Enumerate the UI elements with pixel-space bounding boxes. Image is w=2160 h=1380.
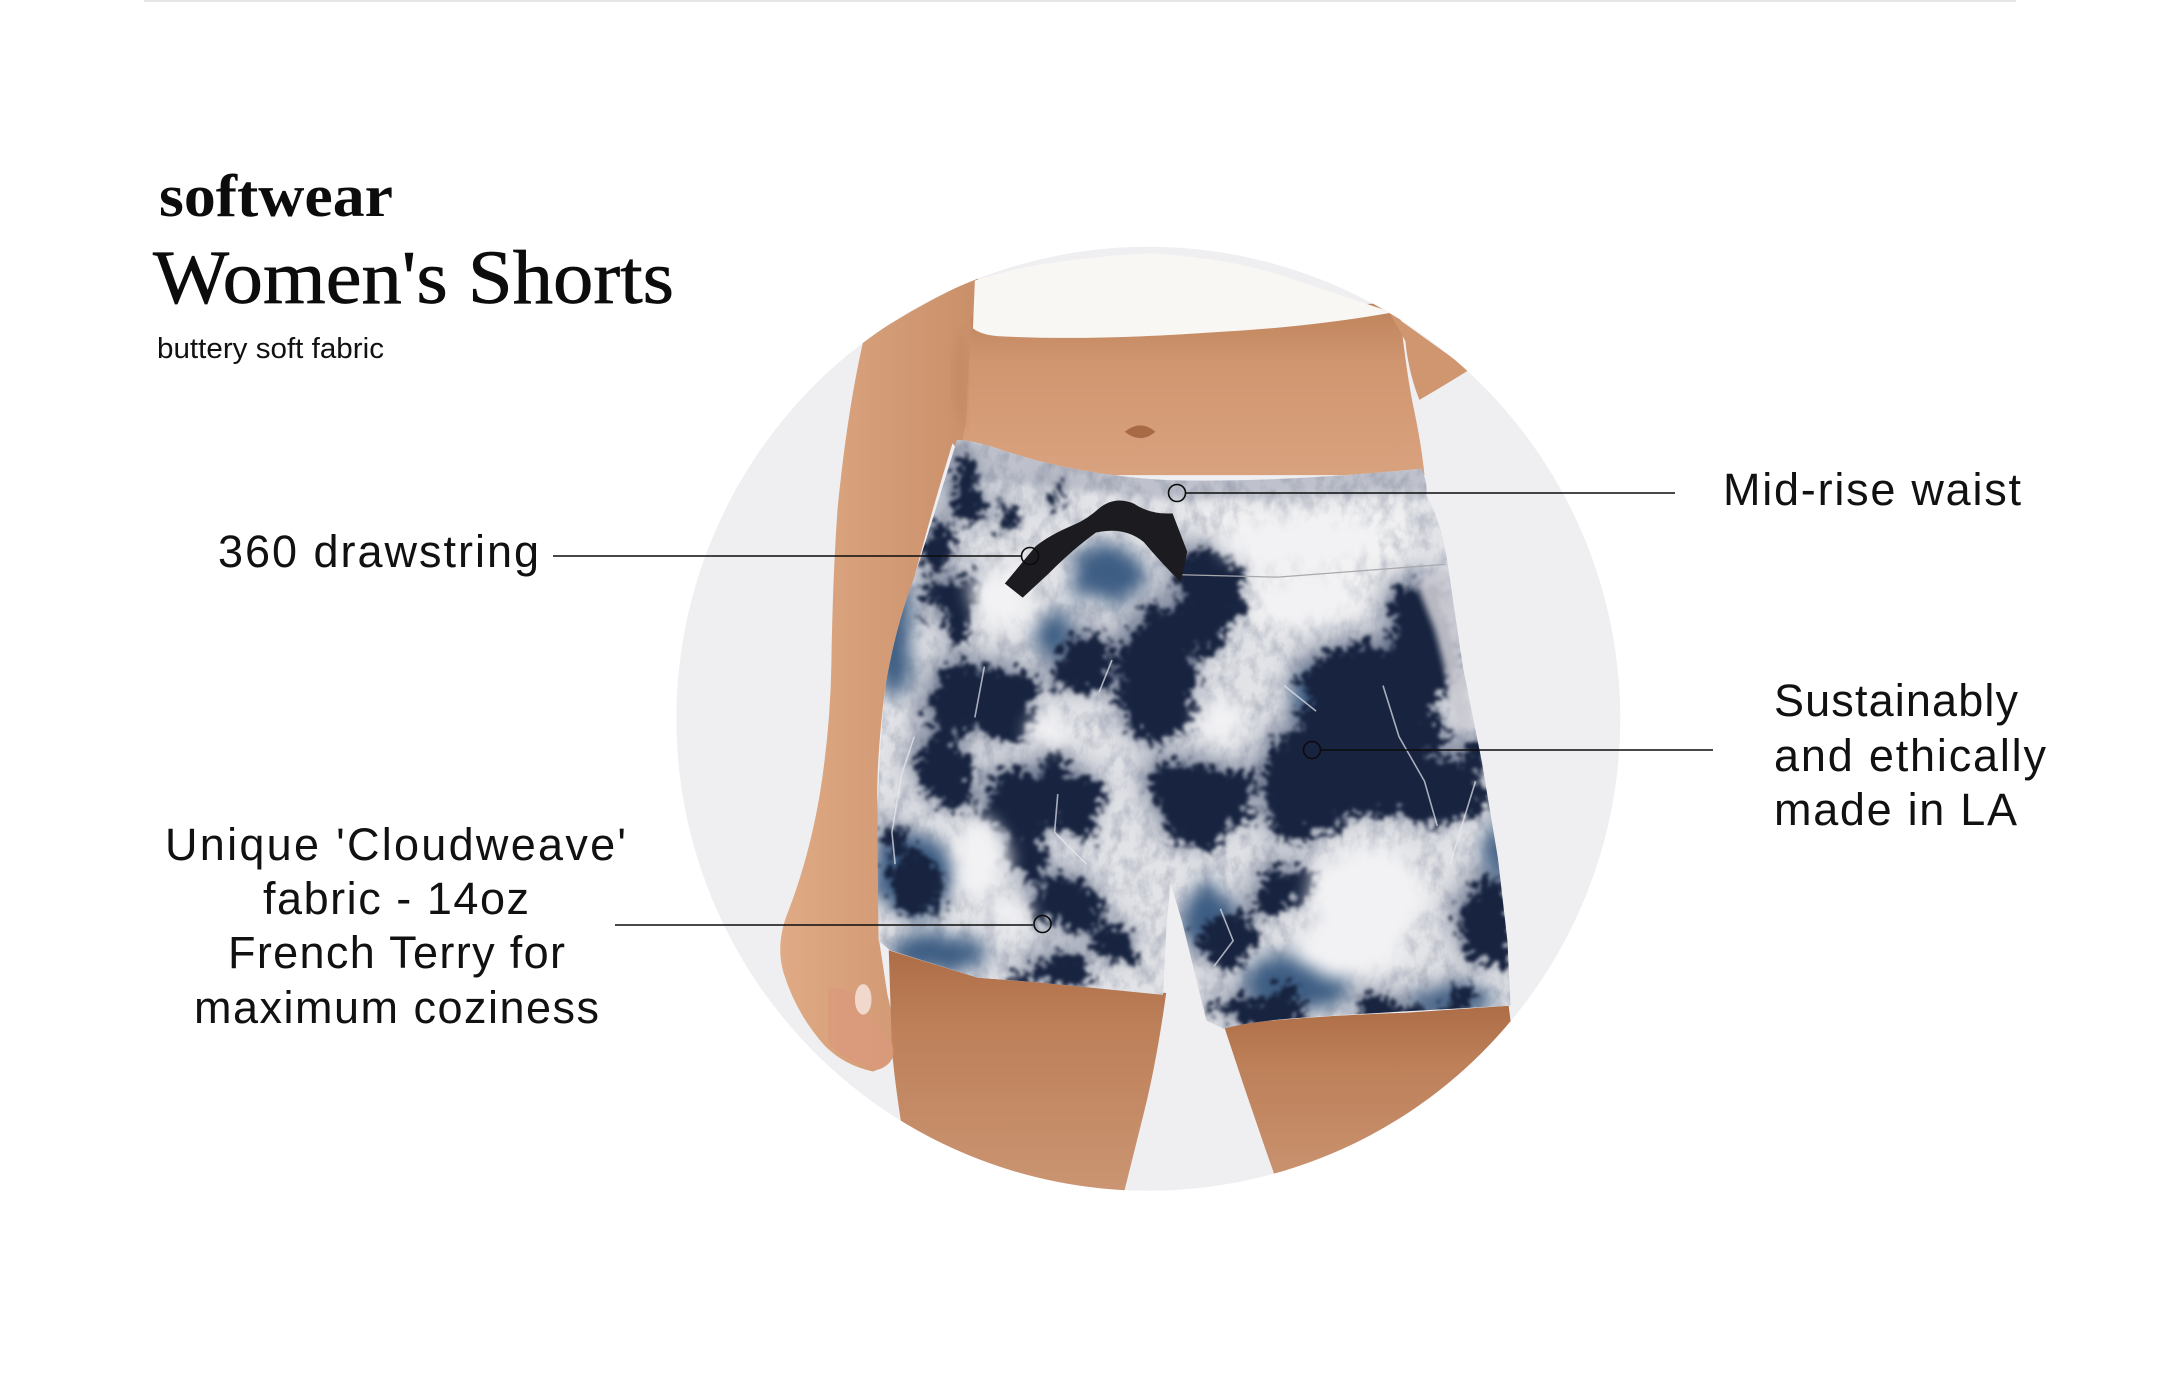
waistband seam (1176, 564, 1445, 577)
fabric mottling (878, 440, 1510, 1028)
white crop top (973, 253, 1393, 338)
dye halo (880, 445, 1506, 1022)
callout: Cloudweave fabric: fabric - 14oz (263, 873, 529, 924)
right thigh (1224, 1006, 1510, 1174)
white cloud highlights (951, 515, 1424, 976)
leader line: waist (1168, 484, 1675, 502)
fabric cracks (892, 660, 1476, 966)
right arm sliver (1389, 312, 1469, 400)
callout: Sustainably made: and ethically (1774, 730, 2046, 781)
fingers (878, 1042, 894, 1070)
callout: Cloudweave fabric: French Terry for (228, 927, 565, 978)
navel (1125, 425, 1155, 438)
waistband grey (946, 440, 1431, 501)
leader line: sustainability (1304, 742, 1713, 758)
brand name: softwear (159, 163, 393, 229)
callout: Cloudweave fabric: Unique 'Cloudweave' (165, 819, 626, 870)
callout: Sustainably made: made in LA (1774, 784, 2017, 835)
top divider bar (144, 0, 2016, 2)
model arm (780, 277, 978, 1071)
product title: Women's Shorts (153, 236, 674, 320)
fingernail (855, 984, 872, 1015)
leader line: fabric (615, 916, 1051, 932)
callout: 360 drawstring: 360 drawstring (218, 526, 539, 577)
side pocket panel (1415, 568, 1472, 730)
callout: Cloudweave fabric: maximum coziness (194, 982, 599, 1033)
product photo circle (676, 247, 1620, 1190)
clean white yoke (1192, 502, 1409, 624)
callout: Cloudweave fabric (165, 819, 1051, 1033)
model torso (953, 303, 1424, 475)
callout: Mid-rise waist (1168, 464, 2021, 515)
callout: Sustainably made: Sustainably (1774, 675, 2018, 726)
subtitle: buttery soft fabric (157, 333, 384, 365)
navy dye blotches (880, 445, 1506, 1022)
circle background (676, 247, 1620, 1190)
callout: Mid-rise waist: Mid-rise waist (1723, 464, 2021, 515)
torso side shading (952, 328, 968, 430)
callout: 360 drawstring (218, 526, 1038, 577)
drawstring knot and ties (1005, 501, 1187, 598)
left thigh (889, 950, 1166, 1202)
fabric base (857, 424, 1533, 1036)
mid blue patches (873, 547, 1509, 1014)
callout: Sustainably made (1304, 675, 2046, 835)
tie-dye shorts (857, 424, 1533, 1036)
leader line: drawstring (553, 548, 1038, 564)
